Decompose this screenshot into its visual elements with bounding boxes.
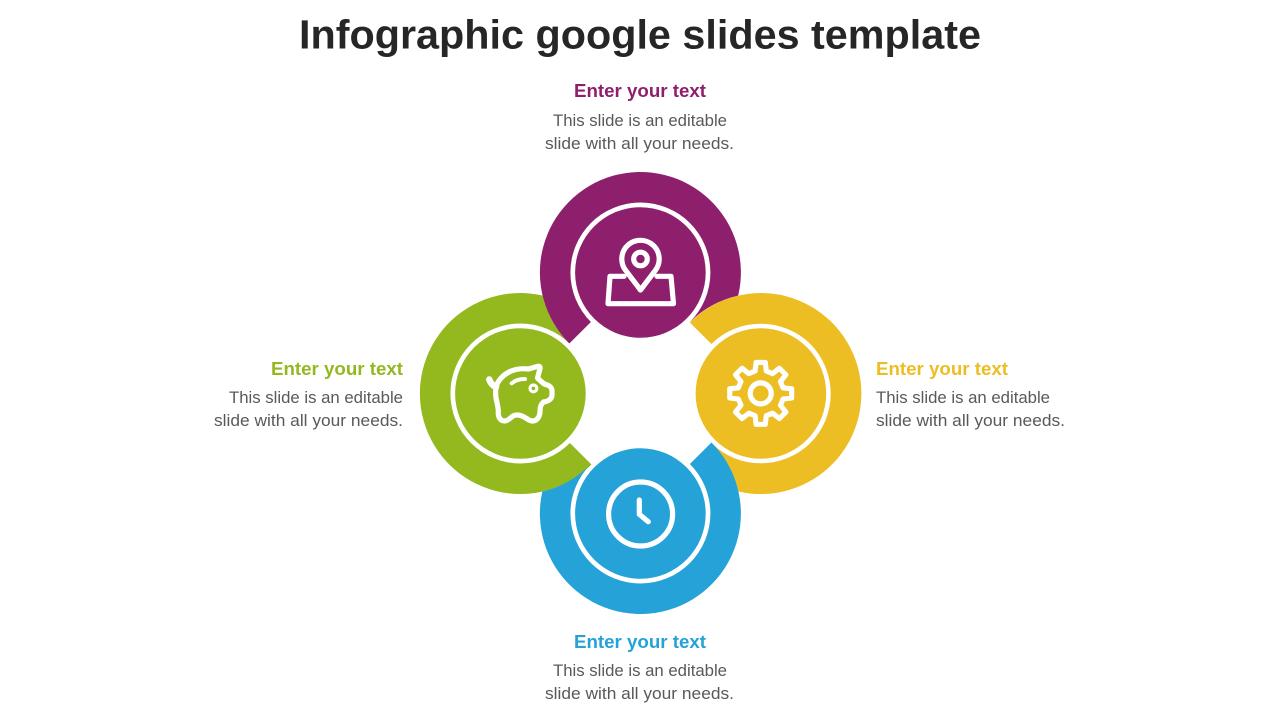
icon: piggy bank: [489, 366, 552, 421]
icon: clock: [609, 482, 673, 546]
heading: green: Enter your text: [271, 359, 403, 379]
title: Infographic google slides template: [299, 12, 981, 58]
panel: bottom blue item text: [545, 632, 734, 703]
heading: blue: Enter your text: [574, 632, 706, 652]
heading: purple: Enter your text: [574, 81, 706, 101]
text block: purple: [545, 112, 734, 153]
panel: yellow circle: [690, 293, 861, 494]
panel: top purple item text: [545, 81, 734, 153]
text block: blue: slide with all your needs.: [545, 685, 734, 703]
panel: purple circle: [540, 172, 741, 344]
icon: map pin: [608, 240, 674, 304]
text block: green: [214, 389, 403, 430]
panel: green circle: [420, 293, 591, 494]
text block: blue: This slide is an editable: [553, 662, 727, 680]
text block: purple: This slide is an editable: [553, 112, 727, 130]
heading: yellow: Enter your text: [876, 359, 1008, 379]
panel: right yellow item text: [876, 359, 1065, 430]
text block: green: slide with all your needs.: [214, 412, 403, 430]
text block: green: This slide is an editable: [229, 389, 403, 407]
panel: left green item text: [214, 359, 403, 430]
text block: yellow: This slide is an editable: [876, 389, 1050, 407]
panel: blue circle: [540, 442, 741, 614]
text block: blue: [545, 662, 734, 703]
icon: gear: [730, 362, 792, 424]
text block: purple: slide with all your needs.: [545, 135, 734, 153]
text block: yellow: slide with all your needs.: [876, 412, 1065, 430]
text block: yellow: [876, 389, 1065, 430]
